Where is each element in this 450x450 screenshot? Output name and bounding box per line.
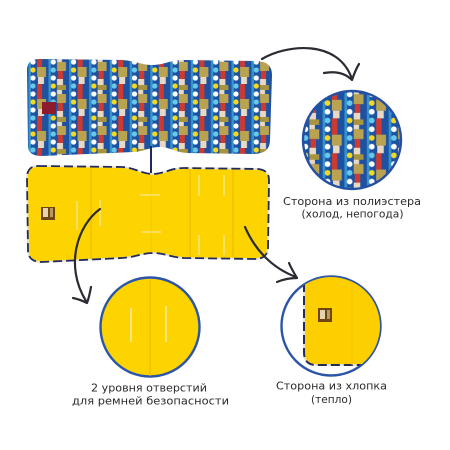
detail circle: cotton corner	[282, 270, 385, 376]
caption: strap holes: для ремней безопасности	[72, 394, 229, 408]
icon: red label on polyester side	[42, 102, 56, 114]
caption: cotton side: Сторона из хлопка	[276, 380, 387, 392]
caption: strap holes	[72, 382, 229, 408]
arrow: to cotton detail	[245, 227, 297, 282]
caption: strap holes: 2 уровня отверстий	[91, 382, 207, 394]
caption: polyester side: (холод, непогода)	[302, 208, 404, 220]
connector between the two sides	[150, 146, 152, 174]
icon: brown label on cotton corner	[314, 306, 332, 322]
detail circle: polyester fabric	[303, 91, 401, 189]
caption: cotton side: (тепло)	[311, 393, 352, 406]
arrow: to polyester detail	[262, 48, 359, 80]
detail circle: strap holes	[100, 278, 200, 376]
fold lines	[91, 168, 233, 259]
panel: cotton side of the liner	[27, 166, 269, 262]
caption: cotton side	[276, 380, 387, 406]
panel: polyester side of the liner	[27, 59, 272, 156]
icon: brown label on cotton side	[38, 205, 55, 220]
safety strap slots	[77, 175, 224, 255]
caption: polyester side	[283, 195, 421, 220]
caption: polyester side: Сторона из полиэстера	[283, 195, 421, 208]
arrow: to strap holes detail	[73, 209, 100, 303]
